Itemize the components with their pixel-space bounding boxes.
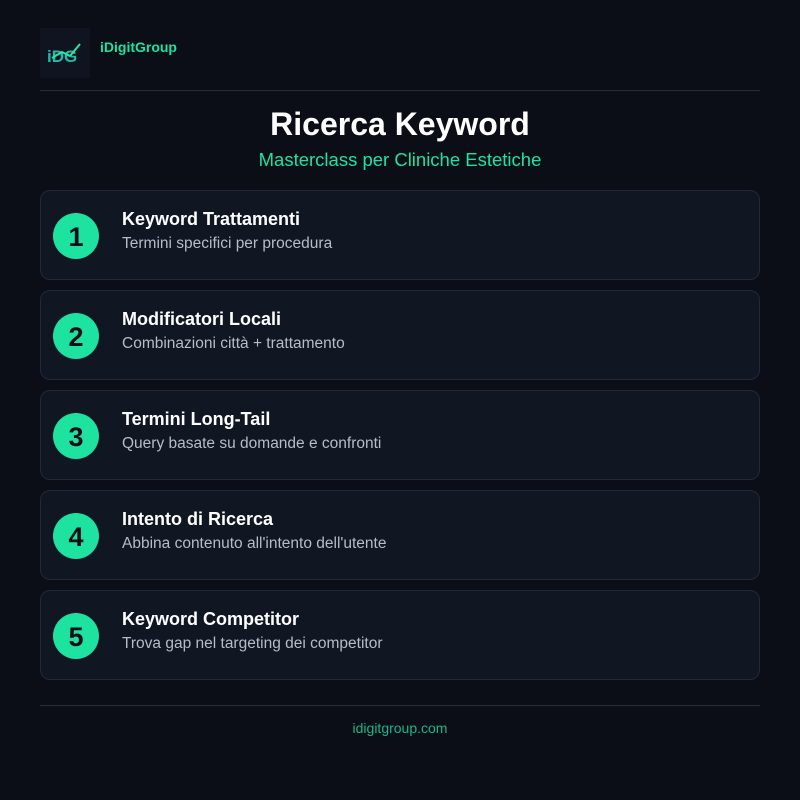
card 3: 3 [68,422,84,452]
card 4 [40,490,760,580]
card 2: Combinazioni città + trattamento [122,335,345,352]
card 5 [40,590,760,680]
card 1 [40,190,760,280]
card 5: Keyword Competitor [122,609,299,629]
brand name: iDigitGroup [100,39,177,55]
logo: iDG [47,47,77,66]
card 1: Termini specifici per procedura [122,235,332,252]
card 5: Trova gap nel targeting dei competitor [122,635,382,652]
subtitle: Masterclass per Cliniche Estetiche [259,149,541,170]
card 4: Intento di Ricerca [122,509,273,529]
card 3 [40,390,760,480]
logo [40,28,90,78]
title: Ricerca Keyword [270,106,530,142]
card 1: Keyword Trattamenti [122,209,300,229]
footer: idigitgroup.com [353,720,447,736]
card 1: 1 [68,222,84,252]
card 4: 4 [68,522,84,552]
card 2: 2 [68,322,84,352]
card 4: Abbina contenuto all'intento dell'utente [122,535,386,552]
card 2 [40,290,760,380]
card 2: Modificatori Locali [122,309,281,329]
card 3: Query basate su domande e confronti [122,435,381,452]
card 3: Termini Long-Tail [122,409,270,429]
card 5: 5 [68,622,84,652]
